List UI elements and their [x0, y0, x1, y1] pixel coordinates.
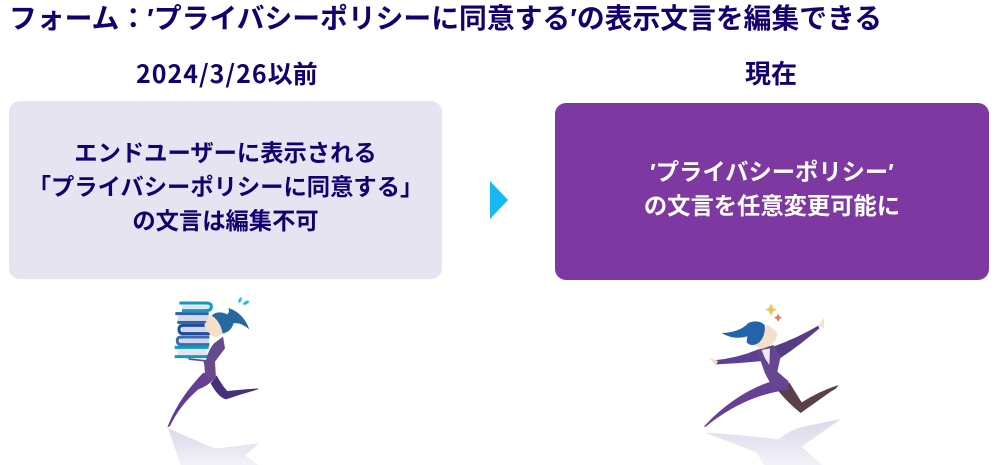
icon: sweat drops: [238, 297, 250, 306]
back leg: [778, 382, 838, 413]
heading: before: 2024/3/26以前: [136, 55, 318, 91]
front leg: [167, 373, 215, 427]
panel: before: [9, 101, 442, 279]
illustration: woman leaping: [704, 304, 840, 465]
arms: [713, 349, 763, 364]
icon: sparkles: [765, 303, 782, 322]
panel: before: の文言は編集不可: [132, 208, 319, 234]
books: [175, 303, 211, 357]
panel: before: エンドユーザーに表示される: [74, 140, 377, 166]
panel: current: [555, 103, 989, 280]
hair: [722, 321, 765, 345]
torso and arm: [187, 337, 225, 379]
front leg: [704, 381, 789, 427]
hand: left: [709, 358, 718, 366]
torso: [757, 345, 788, 390]
panel: before: 「プライバシーポリシーに同意する」: [28, 174, 423, 200]
back leg: [211, 375, 258, 399]
head: [204, 315, 225, 337]
head: [755, 324, 777, 349]
panel: current: の文言を任意変更可能に: [644, 192, 900, 218]
arrow: [490, 181, 508, 219]
shirt: [762, 348, 770, 365]
heading: current: 現在: [745, 59, 797, 89]
panel: current: ′プライバシーポリシー′: [650, 158, 894, 184]
hand: right: [818, 318, 824, 328]
hair: [212, 308, 249, 334]
illustration: woman running with books: [167, 297, 259, 465]
title: フォーム：′プライバシーポリシーに同意する′の表示文言を編集できる: [9, 3, 882, 34]
shadow: [705, 419, 841, 465]
shadow: [168, 428, 259, 465]
